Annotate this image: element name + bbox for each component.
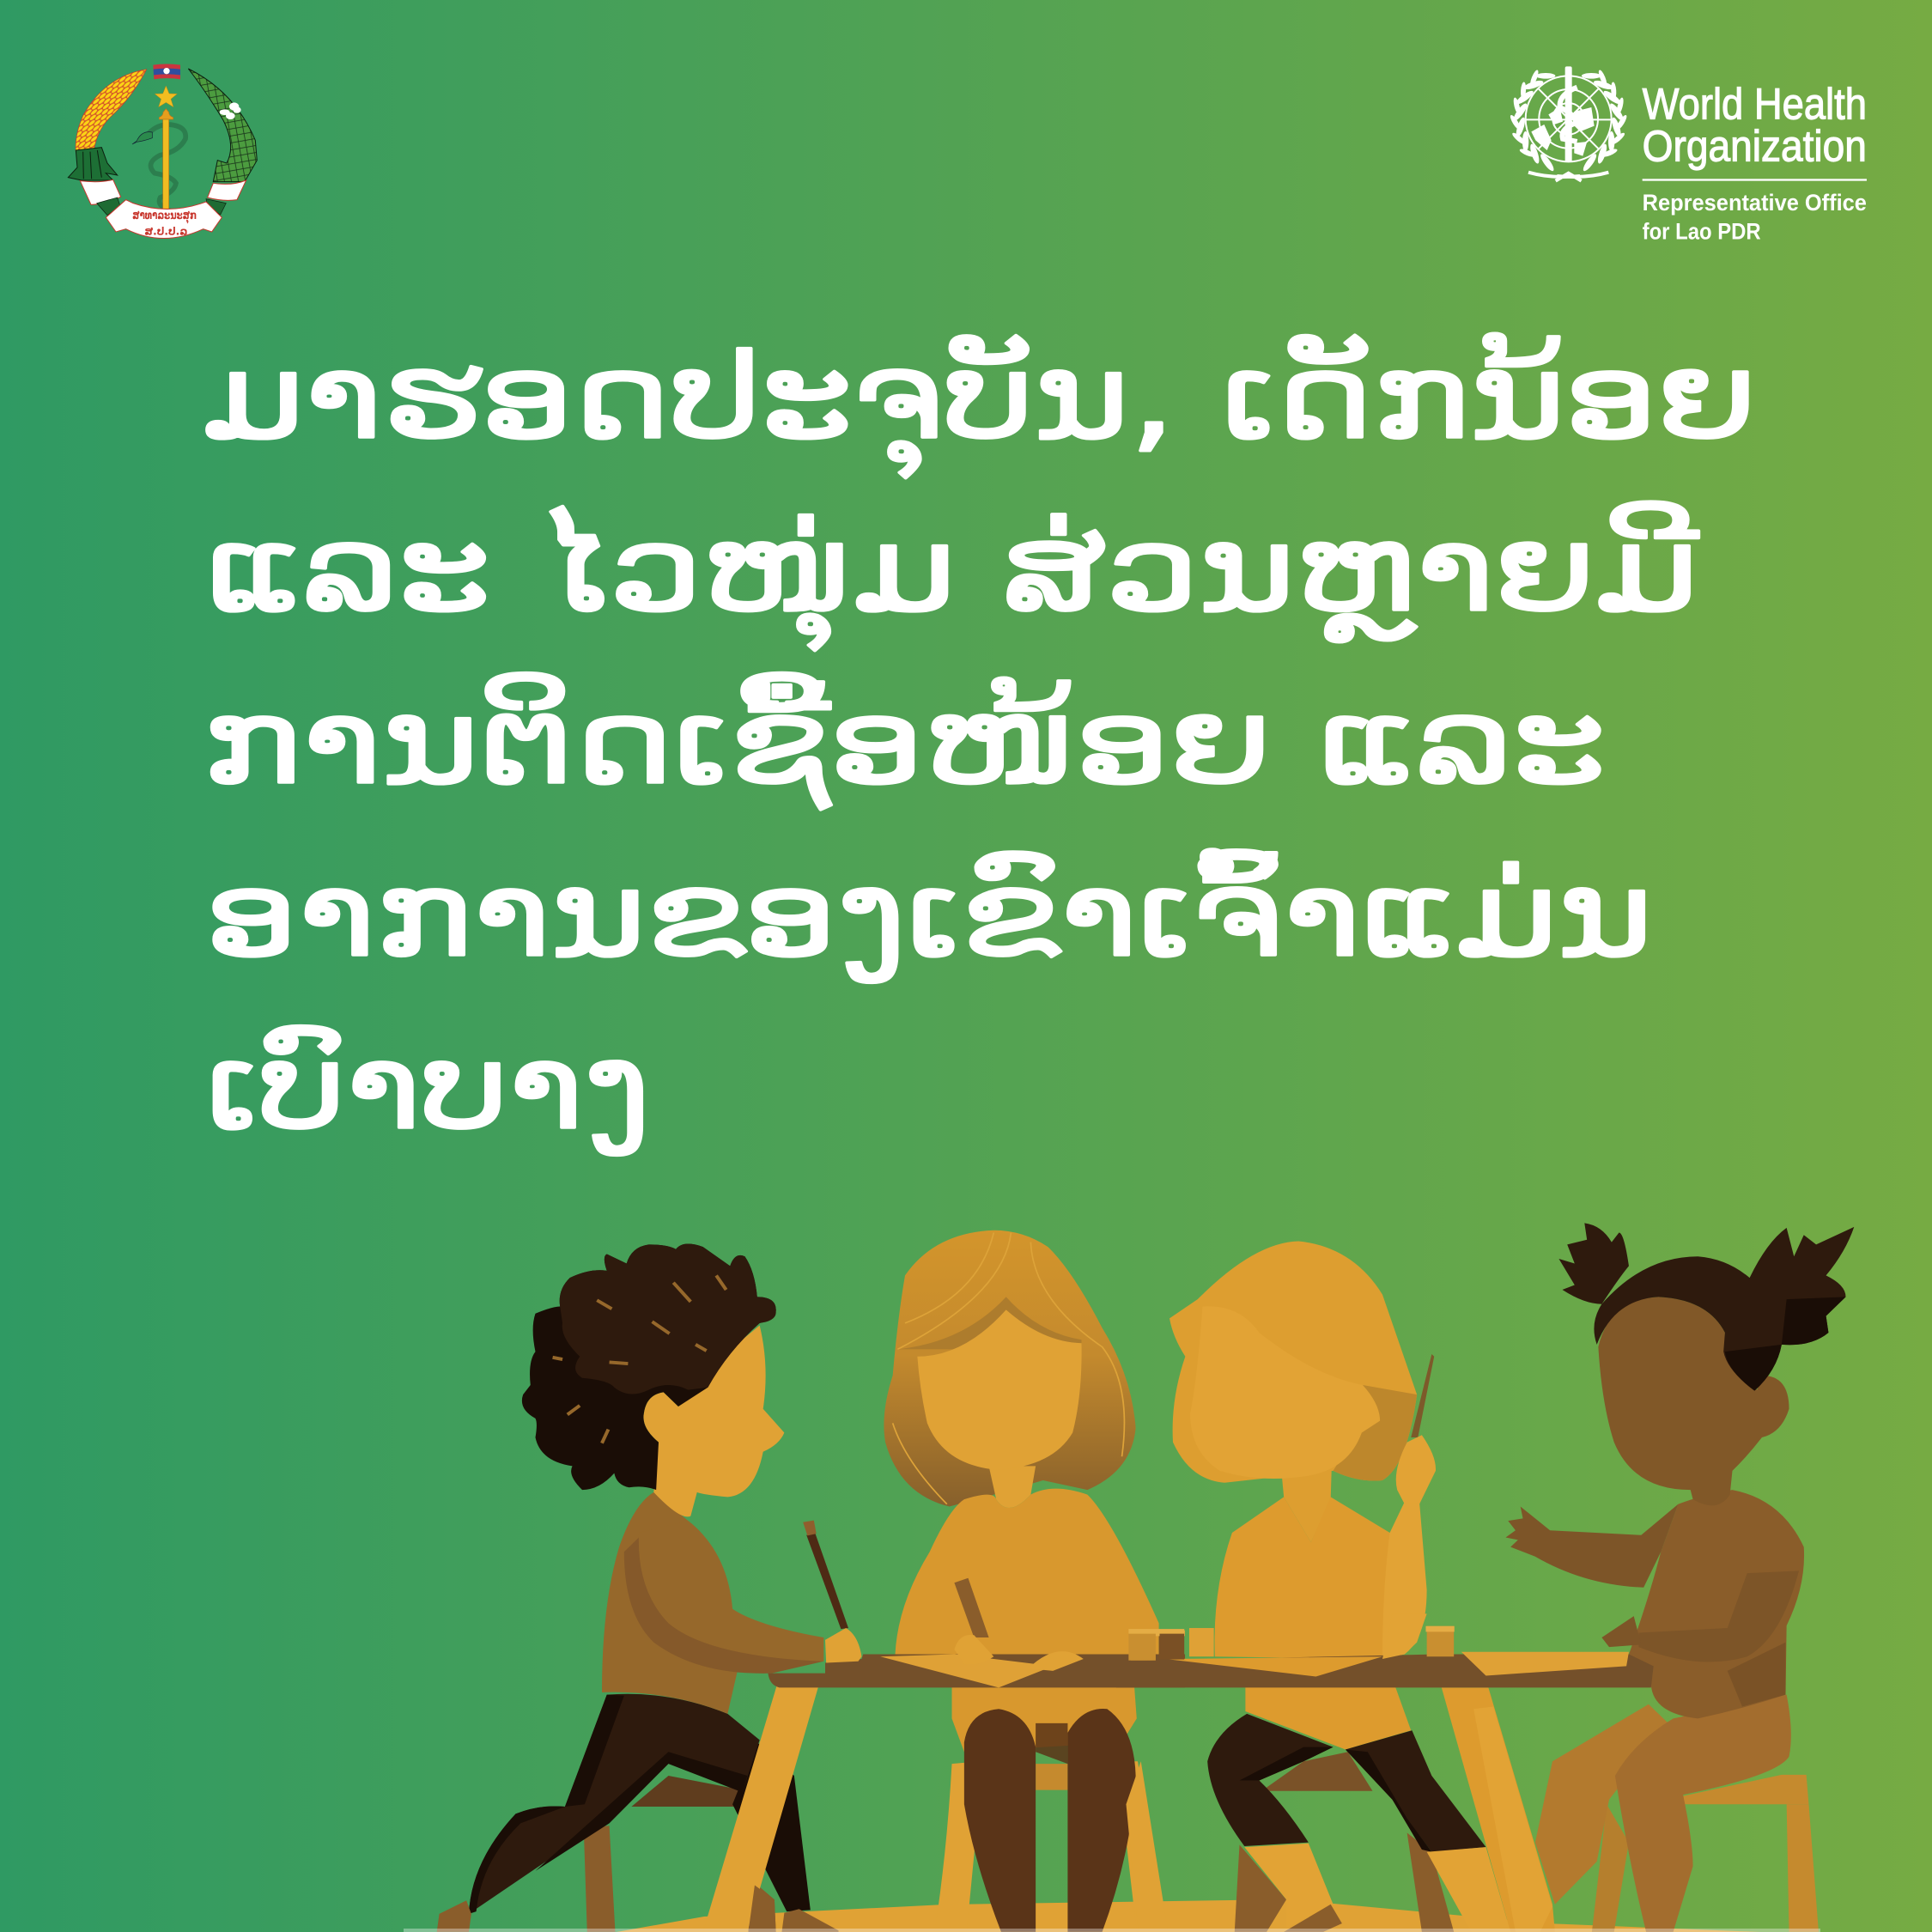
boy's near leg: [469, 1694, 760, 1914]
third girl's hair shadow: [1334, 1385, 1417, 1480]
lower stems: [97, 197, 226, 216]
third girl's pencil: [1411, 1354, 1434, 1437]
table left leg: [703, 1686, 819, 1932]
illustration: children at a table: [404, 1223, 1854, 1932]
icon: snake: [149, 125, 185, 211]
laurel wreath left: [1509, 69, 1556, 173]
hair strands: [893, 1232, 1124, 1504]
banner text: ສາທາລະນະສຸກ: [132, 210, 197, 224]
icon: white flower: [220, 102, 241, 119]
boy's hand: [825, 1628, 861, 1662]
boy's far leg: [732, 1742, 811, 1911]
title line 5: ເບົາບາງ: [206, 1020, 651, 1156]
staff and snake: [1560, 88, 1577, 142]
third girl's arm: [1382, 1502, 1427, 1659]
fourth girl's far arm: [1505, 1504, 1678, 1588]
boy's pencil: [803, 1521, 848, 1629]
icon: green stalk left: [68, 148, 118, 180]
office line two: for Lao PDR: [1643, 218, 1761, 244]
boy's front hair: [560, 1244, 776, 1394]
left half of scene: [437, 1230, 1185, 1932]
staff rod: [1565, 66, 1572, 162]
icon: Lao flag: [153, 64, 180, 79]
boy's arm: [639, 1521, 823, 1662]
centre girl's legs: [964, 1709, 1136, 1932]
logo: Lao Ministry of Health emblem: [68, 64, 257, 238]
hair fringe shadow: [897, 1297, 1081, 1349]
icon: gold star: [155, 86, 177, 107]
fourth girl's head: [1598, 1297, 1789, 1505]
fourth girl's near arm: [1638, 1571, 1799, 1662]
organisation name: World Health: [1643, 79, 1867, 128]
table right leg: [1442, 1687, 1555, 1932]
fourth girl's hand: [1601, 1616, 1641, 1647]
fourth girl's left bun: [1558, 1223, 1629, 1304]
third girl's chair: [1235, 1752, 1454, 1932]
banner text: [132, 210, 197, 237]
fourth girl's waist shadow: [1728, 1643, 1785, 1707]
right ribbon: [208, 180, 246, 200]
third girl's neck: [1281, 1466, 1332, 1542]
logo: WHO: [1509, 66, 1867, 244]
icon: golden staff: [159, 109, 173, 212]
centre chair leg: [1126, 1761, 1168, 1932]
chair of centre girl: [934, 1761, 1167, 1932]
paper right: [1461, 1652, 1629, 1675]
paper left: [880, 1654, 1053, 1687]
icon: rice stalk: [76, 70, 147, 156]
right half of scene: [1116, 1223, 1854, 1932]
title line 2: ແລະ ໄວໜຸ່ມ ສ່ວນຫຼາຍມີ: [206, 502, 1698, 651]
paper centre: [1165, 1656, 1382, 1677]
table top right: [1116, 1654, 1654, 1687]
third girl's lower shirt: [1245, 1686, 1411, 1749]
centre girl's hair: [884, 1230, 1136, 1506]
third girl's socks: [1244, 1844, 1510, 1932]
boy's torso: [602, 1492, 738, 1714]
centre girl's sweater: [896, 1489, 1159, 1671]
title: [203, 330, 1757, 1156]
centre girl's writing hand: [954, 1635, 993, 1664]
laurel wreath right: [1581, 69, 1628, 173]
central scroll banner: [106, 200, 222, 238]
fourth girl's front leg: [1615, 1695, 1791, 1932]
boy's near shoe: [437, 1900, 471, 1932]
icon: snake head: [132, 132, 152, 144]
wreath ribbon: [1528, 173, 1608, 181]
boy's far shoe: [781, 1909, 839, 1932]
stool leg in front: [748, 1886, 776, 1932]
boy's back hair: [522, 1244, 776, 1490]
cups on table: [1128, 1626, 1455, 1661]
boy's stool: [584, 1776, 776, 1932]
icon: WHO emblem: [1509, 69, 1628, 181]
fourth girl's back leg: [1535, 1704, 1668, 1905]
third girl's leggings: [1207, 1714, 1485, 1852]
cups: [1129, 1631, 1185, 1661]
fourth girl's stool: [1592, 1775, 1819, 1932]
icon: leaf spike right: [188, 69, 257, 182]
boy's leg shadow: [469, 1695, 747, 1914]
hair shadow: [1725, 1297, 1846, 1391]
globe: [1526, 76, 1612, 161]
third girl's face: [1190, 1306, 1380, 1479]
third girl's shoe: [1284, 1905, 1342, 1932]
left ribbon: [80, 179, 121, 204]
boy's arm shadow: [624, 1538, 823, 1674]
banner text: ສ.ປ.ປ.ລ: [144, 225, 187, 237]
continents: [1531, 107, 1595, 156]
hair highlights: [553, 1275, 726, 1443]
centre girl's face: [917, 1309, 1082, 1470]
fourth girl's torso: [1626, 1490, 1804, 1718]
faint strip at bottom: [404, 1929, 1820, 1932]
centre girl's skirt: [952, 1686, 1137, 1752]
floor: [617, 1899, 1760, 1932]
third girl's shirt: [1214, 1497, 1390, 1659]
third girl's hand: [1396, 1435, 1436, 1504]
title line 1: ມາຮອດປະຈຸບັນ, ເດັກນ້ອຍ: [203, 330, 1757, 478]
title line 4: ອາການຂອງເຂົາເຈົ້າແມ່ນ: [206, 848, 1653, 983]
office line one: Representative Office: [1643, 190, 1867, 216]
organisation name second line: Organization: [1643, 122, 1867, 171]
third girl's hair: [1170, 1241, 1417, 1483]
table top left: [768, 1654, 1185, 1687]
centre girl's neck: [989, 1466, 1036, 1508]
centre girl's pencil: [954, 1578, 989, 1637]
centre girl's other hand: [1029, 1651, 1084, 1671]
title line 3: ການຕິດເຊື້ອໜ້ອຍ ແລະ: [203, 673, 1606, 811]
fourth girl's hair: [1594, 1227, 1854, 1391]
third girl's elbow: [1382, 1613, 1427, 1659]
boy's face, ear and neck: [643, 1326, 784, 1516]
